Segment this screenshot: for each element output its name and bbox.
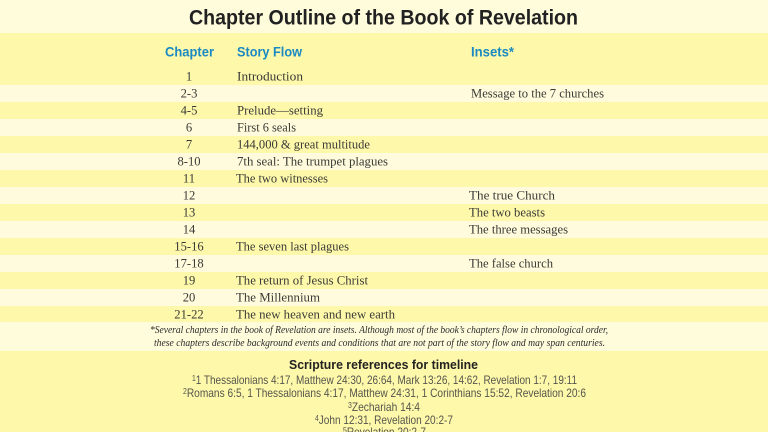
- insets column: The two beasts: [469, 206, 545, 220]
- scripture list: 4: [315, 414, 319, 423]
- story flow column: Prelude—setting: [237, 104, 324, 118]
- footnote on insets: [150, 325, 608, 349]
- chapter column: 1: [186, 70, 192, 84]
- scripture list: Romans 6:5, 1 Thessalonians 4:17, Matthew 24:31, 1 Corinthians 15:52, Revelation 20:6: [187, 386, 586, 400]
- scripture list: [183, 373, 586, 432]
- scripture list: Zechariah 14:4: [352, 400, 420, 414]
- story flow column: 7th seal: The trumpet plagues: [237, 154, 388, 168]
- chapter column: 14: [183, 222, 196, 236]
- chapter column: 19: [183, 274, 195, 288]
- story flow column: The new heaven and new earth: [236, 308, 396, 322]
- chapter column: 13: [183, 206, 195, 220]
- footnote on insets: *Several chapters in the book of Revelation are insets. Although most of the book’s chapters flow in chronological order,: [150, 325, 608, 336]
- chapter column: 6: [186, 120, 192, 134]
- column headings: Insets*: [471, 44, 515, 60]
- column headings: [165, 44, 515, 60]
- chapter column: 2-3: [181, 86, 197, 100]
- scripture heading: Scripture references for timeline: [289, 358, 478, 372]
- story flow column: [236, 70, 396, 322]
- insets column: The false church: [469, 256, 554, 270]
- scripture list: 1: [192, 374, 196, 383]
- chapter column: 21-22: [174, 308, 204, 322]
- footnote on insets: these chapters describe background events and conditions that are not part of the story flow and may span centuries.: [154, 338, 605, 349]
- story flow column: The two witnesses: [236, 172, 328, 186]
- chapter column: 17-18: [174, 256, 204, 270]
- panel: chapter outline table: [0, 33, 768, 322]
- chapter column: 7: [186, 138, 192, 152]
- title: Chapter Outline of the Book of Revelation: [189, 6, 578, 30]
- story flow column: The return of Jesus Christ: [236, 274, 368, 288]
- scripture list: 2: [183, 387, 187, 396]
- story flow column: First 6 seals: [237, 120, 296, 134]
- story flow column: 144,000 & great multitude: [237, 138, 370, 152]
- insets column: The three messages: [469, 222, 568, 236]
- story flow column: The seven last plagues: [236, 240, 349, 254]
- insets column: Message to the 7 churches: [471, 86, 604, 100]
- insets column: [469, 86, 604, 270]
- chapter column: 20: [183, 290, 195, 304]
- column headings: Story Flow: [237, 44, 302, 60]
- column headings: Chapter: [165, 44, 215, 60]
- story flow column: Introduction: [237, 70, 304, 84]
- chapter column: 11: [183, 172, 195, 186]
- chapter column: 4-5: [181, 104, 197, 118]
- insets column: The true Church: [469, 188, 556, 202]
- scripture list: 1 Thessalonians 4:17, Matthew 24:30, 26:64, Mark 13:26, 14:62, Revelation 1:7, 19:11: [196, 373, 577, 387]
- chapter column: 15-16: [174, 240, 204, 254]
- story flow column: The Millennium: [236, 290, 320, 304]
- panel: scripture references: [0, 351, 768, 432]
- scripture list: 3: [348, 401, 352, 410]
- chapter column: 12: [183, 188, 195, 202]
- scripture list: John 12:31, Revelation 20:2-7: [319, 413, 453, 427]
- chapter column: [174, 70, 204, 322]
- chapter column: 8-10: [177, 154, 201, 168]
